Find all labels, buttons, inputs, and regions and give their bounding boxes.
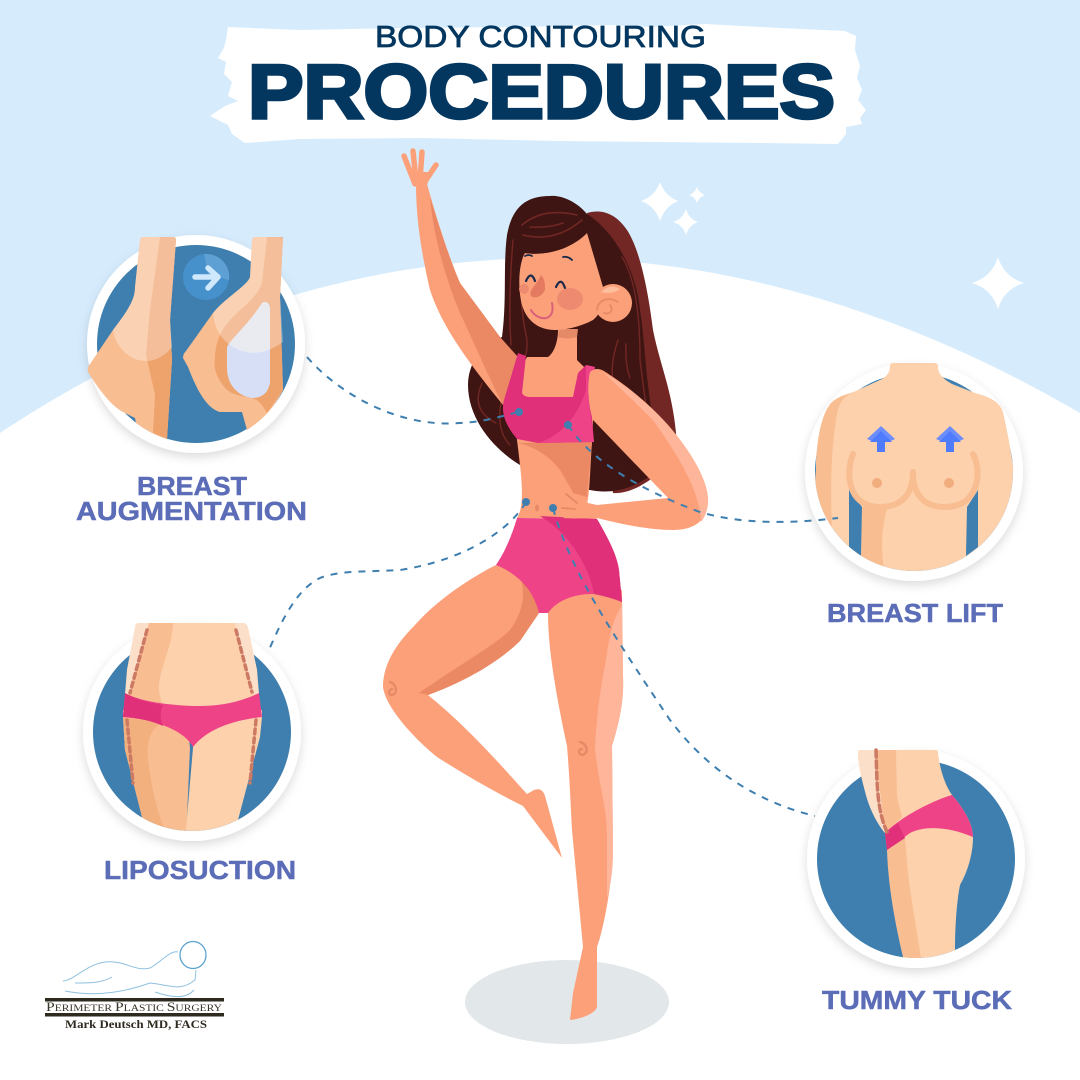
logo practice name: PERIMETER PLASTIC SURGERY (46, 999, 222, 1014)
raised hand (404, 151, 436, 186)
belly shadow (517, 442, 592, 497)
badge disc (817, 760, 1015, 958)
hips illustration (123, 623, 262, 840)
label: breast lift: BREAST LIFT (827, 598, 1003, 628)
hair fringe (518, 198, 588, 260)
label: breast augmentation: BREAST (137, 471, 247, 501)
arrow icon (183, 254, 229, 300)
brush stroke (210, 24, 866, 144)
white hill (0, 258, 1080, 1080)
label: breast augmentation: AUGMENTATION (76, 496, 307, 526)
eyebrows (525, 255, 572, 260)
raised arm (416, 184, 517, 405)
sparkles (641, 182, 1024, 309)
neck shadow (558, 329, 578, 338)
closed eyes (526, 276, 565, 288)
cheeks (519, 284, 583, 310)
ear (594, 284, 632, 322)
navel (535, 504, 539, 512)
up arrows (867, 426, 964, 452)
torso (515, 330, 597, 519)
logo doctor name: Mark Deutsch MD, FACS (65, 1019, 207, 1031)
woman figure (383, 151, 708, 1020)
logo bars (45, 998, 224, 1002)
briefs shadow (540, 516, 622, 602)
smile (531, 303, 553, 318)
face (519, 233, 604, 330)
panel: liposuction (83, 623, 301, 841)
side body illustration (858, 750, 973, 965)
label: liposuction: LIPOSUCTION (104, 855, 296, 885)
panel: breast lift (805, 363, 1023, 581)
breast illustration left (88, 237, 176, 439)
standing leg highlight (595, 606, 623, 898)
badge disc (815, 373, 1013, 571)
badge ring (83, 623, 301, 841)
badge ring (87, 235, 305, 453)
raised arm shadow (430, 197, 518, 405)
hair back light (587, 211, 677, 493)
breast illustration right (183, 237, 283, 430)
bent arm (588, 369, 708, 530)
connector dots (515, 408, 572, 512)
badge disc (93, 633, 291, 831)
bra (503, 353, 595, 443)
heading: body contouring: BODY CONTOURING (375, 19, 706, 54)
panel: tummy tuck (807, 750, 1025, 968)
raised leg (383, 565, 562, 858)
floor shadow (465, 960, 669, 1044)
title banner (210, 19, 866, 144)
badge ring (805, 363, 1023, 581)
heading: procedures: PROCEDURES (248, 50, 835, 135)
bra highlight (538, 365, 595, 443)
hand shadow (562, 494, 577, 509)
fringe strands (522, 213, 582, 237)
raised leg shadow (419, 575, 539, 695)
briefs (496, 518, 622, 613)
nose (530, 275, 545, 297)
label: breast augmentation (76, 471, 307, 526)
hair back dark (468, 196, 660, 491)
logo line art (63, 942, 206, 997)
knee swirls (389, 682, 587, 755)
bent arm highlight (603, 372, 708, 522)
badge disc (97, 245, 295, 443)
ear detail (601, 287, 620, 293)
badge ring (807, 750, 1025, 968)
panel: breast augmentation (87, 235, 305, 453)
hand on hip (562, 493, 597, 518)
hair strands (478, 240, 646, 445)
logo (45, 942, 224, 1031)
standing leg (548, 590, 623, 1020)
connector lines (268, 357, 838, 816)
torso illustration (810, 363, 1014, 580)
label: tummy tuck: TUMMY TUCK (822, 985, 1012, 1015)
